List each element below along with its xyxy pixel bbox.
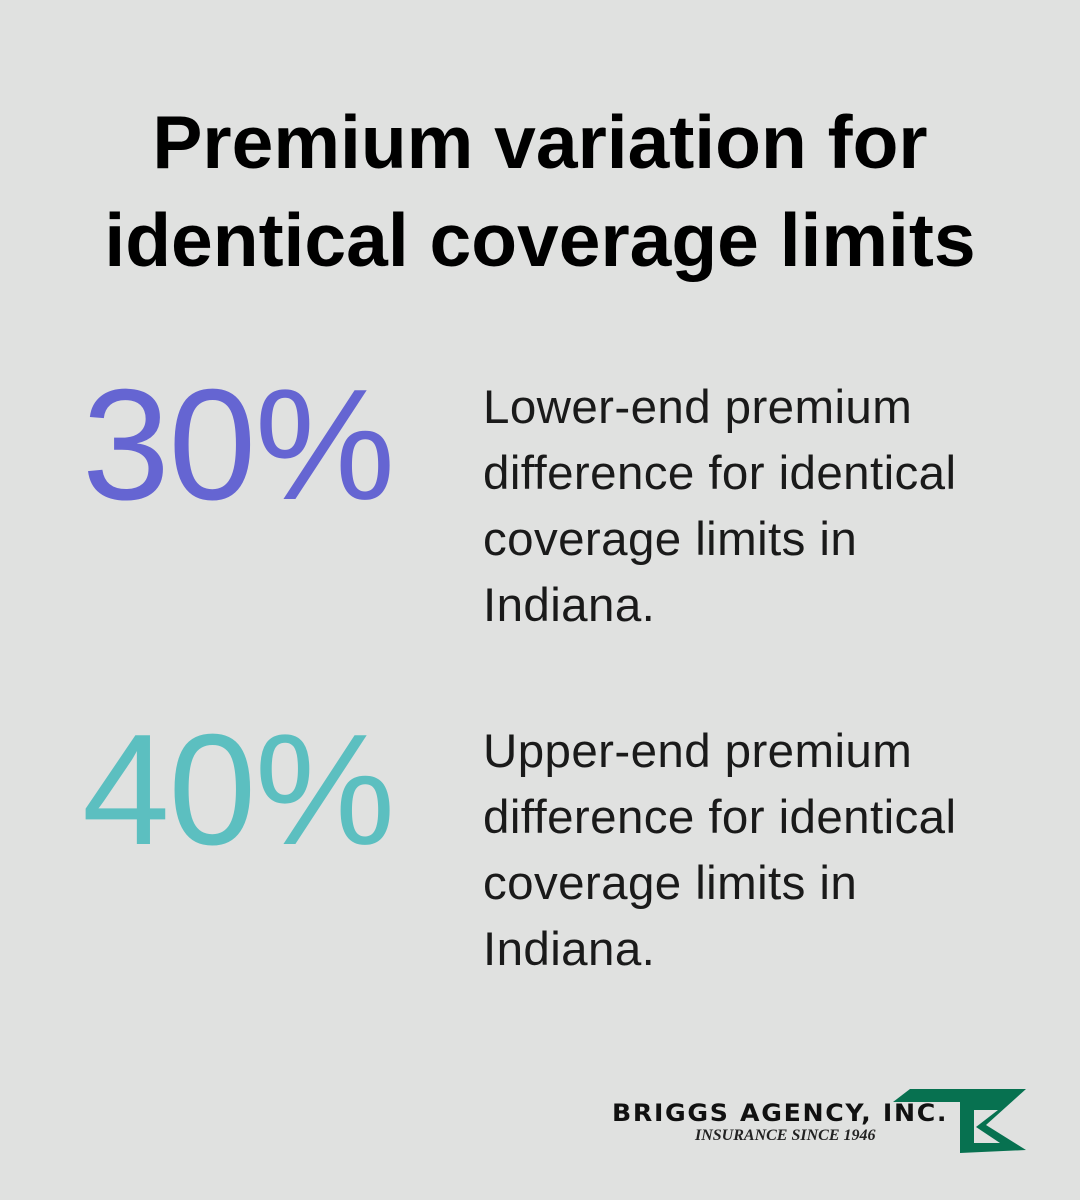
text: upper-end description: Upper-end premium (483, 725, 912, 778)
text: lower-end description: difference for identical (483, 447, 956, 500)
logo mark (893, 1089, 1026, 1153)
title: identical coverage limits (104, 198, 976, 282)
text: upper-end description: Indiana. (483, 923, 655, 976)
text: lower-end description: Lower-end premium (483, 381, 912, 434)
text: lower-end description (483, 381, 956, 632)
stat: 30%: 30% (82, 357, 394, 533)
title: Premium variation for (152, 100, 928, 184)
text: lower-end description: coverage limits in (483, 513, 857, 566)
text: upper-end description: difference for identical (483, 791, 956, 844)
logo text: BRIGGS AGENCY, INC. (612, 1099, 948, 1127)
stat: 40%: 40% (82, 702, 394, 878)
text: lower-end description: Indiana. (483, 579, 655, 632)
logo: Briggs Agency (612, 1089, 1026, 1153)
title (104, 100, 976, 282)
logo tagline: INSURANCE SINCE 1946 (695, 1127, 876, 1144)
text: upper-end description (483, 725, 956, 976)
text: upper-end description: coverage limits in (483, 857, 857, 910)
